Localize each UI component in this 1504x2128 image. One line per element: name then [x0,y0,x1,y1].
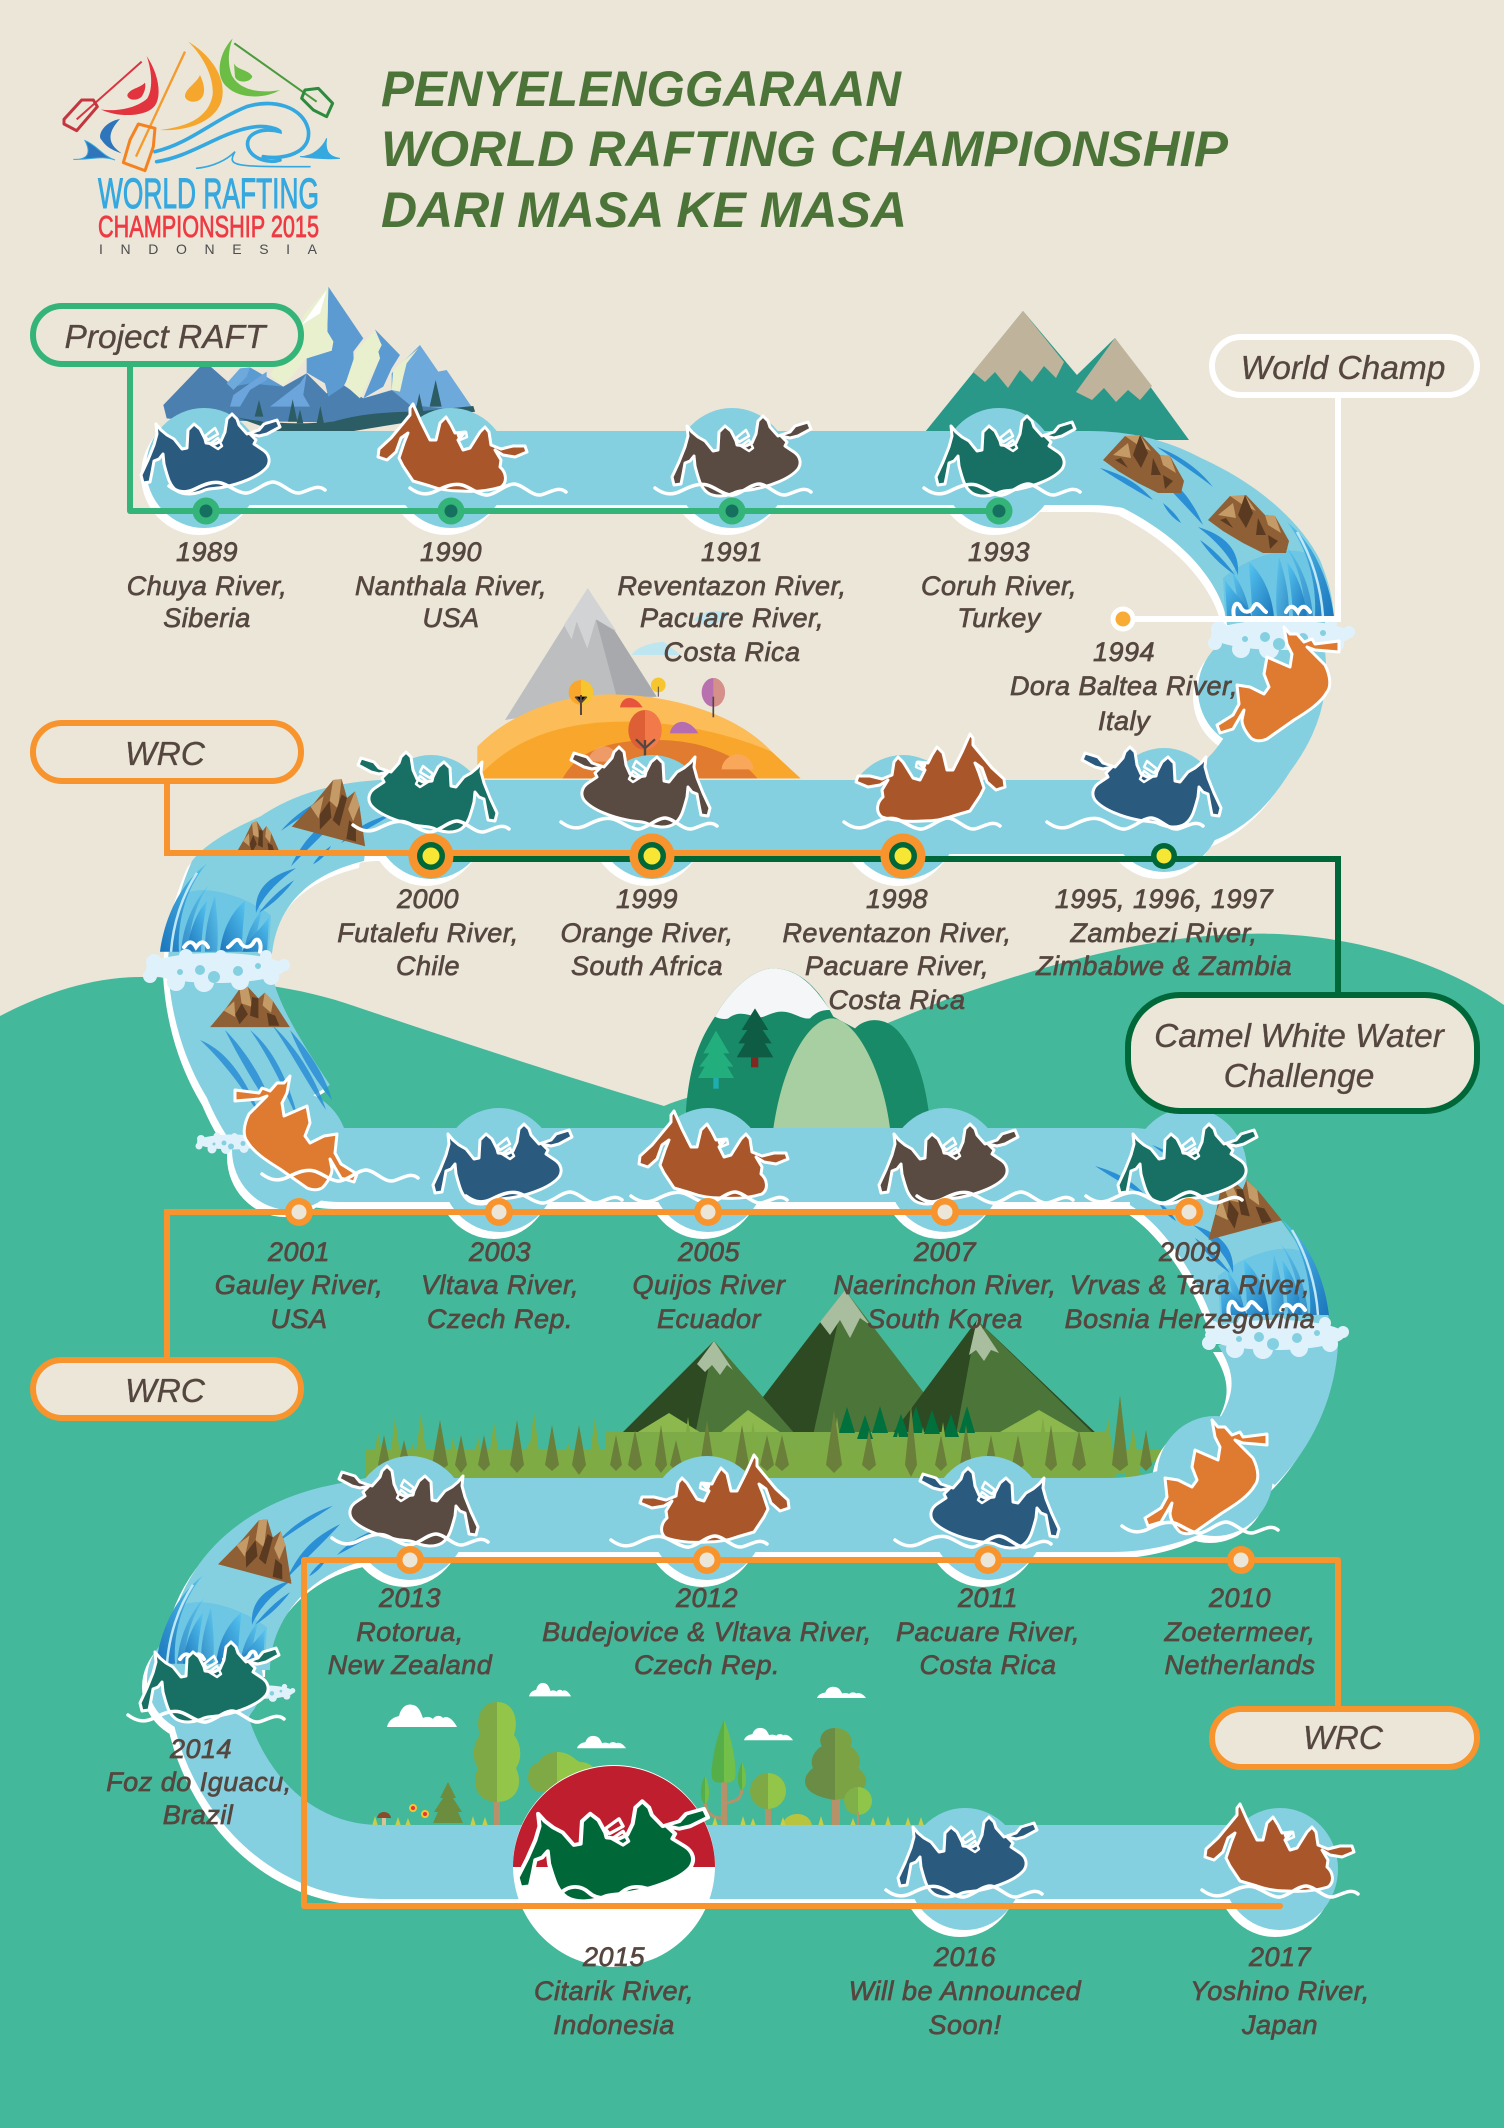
label 2015: Indonesia [553,2010,675,2040]
waterfall 2 [160,770,394,952]
logo [64,38,340,171]
waterfall 2b [200,987,332,1125]
splash 3 [1202,1316,1349,1359]
label 2005: Quijos River [632,1270,786,1300]
label 1994: Dora Baltea River, [1010,671,1238,701]
label 2013: Rotorua, [356,1617,464,1647]
pill: WRC bottom: WRC [1303,1720,1384,1757]
label 2014: Brazil [163,1800,234,1830]
grass [365,1412,1165,1477]
label 2000: Futalefu River, [337,918,519,948]
label 2003: Czech Rep. [427,1304,573,1334]
label 2011: Pacuare River, [896,1617,1080,1647]
label 1993: 1993 [968,537,1030,567]
label 1990: 1990 [420,537,482,567]
label 1993: Coruh River, [921,571,1077,601]
raft 2016 [886,1817,1042,1897]
logo wordmark: INDONESIA [99,241,318,257]
label 2005: Ecuador [657,1304,762,1334]
river: white edge [141,415,1333,1937]
label 2016: 2016 [934,1942,996,1972]
pill: Camel White Water Challenge: Camel White Water [1154,1018,1446,1055]
label 2014: 2014 [170,1734,232,1764]
raft 2012 [611,1455,789,1547]
label 1999: 1999 [616,884,678,914]
label 2015: Citarik River, [534,1976,694,2006]
splash 2 [143,949,290,992]
splash 5 [229,1683,295,1703]
label 2001: 2001 [268,1237,330,1267]
raft 1995-1997 [1047,747,1221,829]
label 2010: 2010 [1209,1583,1271,1613]
label 2000: 2000 [397,884,459,914]
green hills [0,934,1504,2128]
label 2011: Costa Rica [919,1650,1057,1680]
scenery: autumn hill [477,588,801,778]
label 2007: Naerinchon River, [833,1270,1057,1300]
raft 2010 wave [1122,1522,1278,1533]
label 1991: Pacuare River, [640,603,824,633]
label 2017: Japan [1241,2010,1318,2040]
title: DARI MASA KE MASA [381,182,907,238]
label 2014: Foz do Iguacu, [106,1767,292,1797]
title [381,61,1229,238]
pill: Project RAFT: Project RAFT [64,319,268,356]
icon: blue waves [73,104,340,168]
label 2017: Yoshino River, [1190,1976,1370,2006]
timeline: WRC 2001-2009 [167,1198,1203,1358]
label 2016: Will be Announced [849,1976,1082,2006]
label 2013: New Zealand [328,1650,493,1680]
pill: Camel White Water Challenge [1128,995,1477,1111]
raft 1990 [378,404,566,495]
label 1995 1996 1997: Zambezi River, [1069,918,1258,948]
label 2009: Bosnia Herzegovina [1065,1304,1315,1334]
raft 2009 [1086,1124,1257,1204]
raft 1993 [924,416,1080,496]
raft 2003 [433,1124,622,1204]
icon: orange paddler [123,42,223,171]
splash 4 [196,1132,269,1154]
label 2001: USA [270,1304,328,1334]
label 2003: Vltava River, [421,1270,579,1300]
pill: WRC bottom [1212,1709,1477,1767]
small pine row [839,1406,975,1439]
pill: Camel White Water Challenge: Challenge [1224,1058,1374,1095]
icon: red paddler [64,56,159,131]
label 1989: Chuya River, [127,571,287,601]
raft 2005 [631,1111,788,1203]
raft 2015 [518,1801,708,1901]
label 2017: 2017 [1249,1942,1311,1972]
raft 1999 [561,747,717,829]
label 2013: 2013 [379,1583,441,1613]
label 2016: Soon! [928,2010,1002,2040]
label 2009: Vrvas & Tara River, [1070,1270,1310,1300]
pill: WRC top [33,723,301,781]
raft 2011 [895,1468,1059,1548]
raft 2014 [128,1642,284,1722]
logo wordmark [98,170,319,257]
icon: green paddler [220,38,333,117]
timeline: World Champ [1110,396,1338,632]
label 1999: South Africa [571,951,723,981]
splash 1 [1208,616,1355,659]
label 2001: Gauley River, [215,1270,383,1300]
label 1999: Orange River, [560,918,734,948]
raft 1998 [844,734,1005,829]
label 2005: 2005 [678,1237,740,1267]
label 2009: 2009 [1159,1237,1221,1267]
label 2012: Budejovice & Vltava River, [542,1617,872,1647]
pill: World Champ [1212,337,1477,395]
label 1994: 1994 [1093,637,1155,667]
label 2003: 2003 [469,1237,531,1267]
logo wordmark: WORLD RAFTING [98,170,319,218]
label 1994: Italy [1098,706,1151,736]
title: WORLD RAFTING CHAMPIONSHIP [381,121,1229,177]
label 1991: Costa Rica [663,637,801,667]
label 1995 1996 1997: 1995, 1996, 1997 [1055,884,1273,914]
timeline: WRC 1998-2000 [167,783,926,878]
waterfall 4 [156,1506,390,1664]
timeline: Project RAFT [130,365,1012,524]
raft 2010 [1145,1420,1267,1534]
label 1989: 1989 [176,537,238,567]
raft 2013 [332,1466,488,1546]
label 1998: Pacuare River, [805,951,989,981]
label 1995 1996 1997: Zimbabwe & Zambia [1035,951,1292,981]
flag circle 2015 [513,1765,715,1967]
label 1993: Turkey [957,603,1042,633]
label 2007: 2007 [914,1237,976,1267]
scenery: forest and mountains [365,1290,1165,1477]
raft 2007 [879,1124,1073,1204]
title: PENYELENGGARAAN [381,61,902,117]
scenery: green hill [686,968,931,1128]
label 2011: 2011 [958,1583,1018,1613]
pill: WRC middle [33,1360,301,1418]
pill: World Champ: World Champ [1241,350,1445,387]
raft 1989 [141,414,325,494]
label 1990: USA [422,603,480,633]
pill: WRC top: WRC [125,736,206,773]
label 2012: 2012 [676,1583,738,1613]
label 1998: Reventazon River, [782,918,1012,948]
label 2000: Chile [396,951,460,981]
scenery: blue mountains [163,287,475,432]
label 1991: 1991 [701,537,763,567]
label 2010: Zoetermeer, [1163,1617,1316,1647]
label 1998: 1998 [866,884,928,914]
label 1990: Nanthala River, [355,571,547,601]
timeline: Camel White Water Challenge [431,843,1338,992]
raft 1991 [655,416,811,496]
raft 2001 wave [262,1170,418,1181]
scenery: park trees and clouds [372,1683,924,1826]
scenery: teal mountains [925,311,1189,440]
logo wordmark: CHAMPIONSHIP 2015 [98,209,319,244]
label 2015: 2015 [583,1942,645,1972]
label 1989: Siberia [163,603,251,633]
pill: WRC middle: WRC [125,1373,206,1410]
label 2012: Czech Rep. [634,1650,780,1680]
label 2010: Netherlands [1164,1650,1316,1680]
label 2007: South Korea [867,1304,1023,1334]
label 1991: Reventazon River, [617,571,847,601]
raft 2000 [353,752,509,832]
label 1998: Costa Rica [828,985,966,1015]
raft 2001 [235,1076,357,1190]
waterfall 3 [1095,1145,1329,1315]
waterfall 1 [1100,435,1334,617]
timeline: WRC 2010-2017 [304,1546,1338,1906]
pill: Project RAFT [33,306,301,364]
raft 2017 [1202,1804,1358,1897]
river [146,408,1338,1930]
raft 1994 [1217,627,1339,741]
